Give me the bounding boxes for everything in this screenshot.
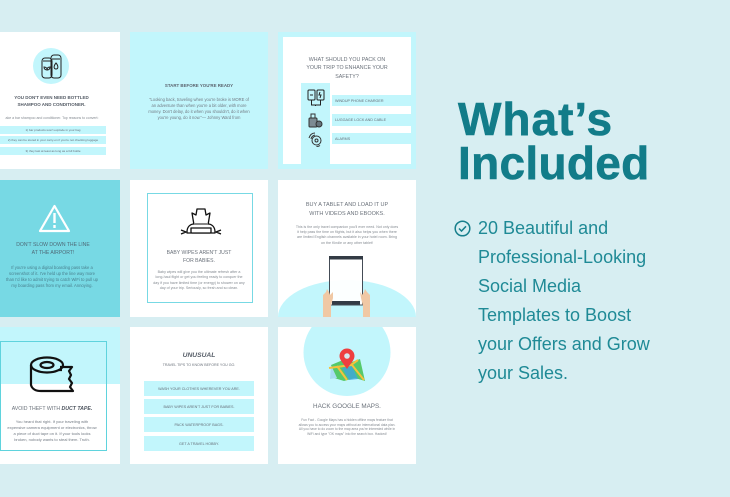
intro text: ake a bar shampoo and conditioner. Top reasons to convert: <box>6 116 98 120</box>
tip 2: BABY WIPES AREN'T JUST FOR BABIES. <box>164 404 234 408</box>
quote: "Looking back, traveling when you're broke is MORE of <box>149 97 249 102</box>
panel: tablet card <box>278 180 416 317</box>
body text: screenshot of it. I've held up the line way more <box>9 271 95 276</box>
description text <box>478 218 650 383</box>
panel: google maps card <box>278 327 416 464</box>
description text: 20 Beautiful and <box>478 218 608 238</box>
icon: luggage lock <box>308 114 322 128</box>
heading: YOU DON'T EVEN NEED BOTTLED <box>14 95 89 100</box>
heading: BUY A TABLET AND LOAD IT UP <box>306 202 388 208</box>
title <box>458 93 650 188</box>
icon: alarm <box>308 132 322 147</box>
list item 3: 3) they last at least as long as a full bottle <box>25 149 81 153</box>
body text: on the Kindle or any other tablet! <box>321 241 373 245</box>
heading: SAFETY? <box>335 74 359 80</box>
heading: WHAT SHOULD YOU PACK ON <box>309 57 385 63</box>
description text: your Offers and Grow <box>478 334 650 354</box>
body text: You heard that right. If your traveling with <box>16 419 88 424</box>
heading <box>306 202 388 217</box>
icon: warning triangle <box>38 204 70 232</box>
body text: day of your trip. Seriously, so fresh and so clean. <box>160 286 238 290</box>
heading <box>14 95 89 107</box>
list item 2: 2) they can be stored in your carry-on if you're not checking luggage <box>8 138 98 142</box>
body text: This is the only travel companion you'll ever need. Not only does <box>296 225 398 229</box>
list item 1 <box>0 126 106 134</box>
body text: Baby wipes will give you the ultimate refresh after a <box>158 270 240 274</box>
heading: START BEFORE YOU'RE READY <box>165 83 233 88</box>
heading: HACK GOOGLE MAPS. <box>313 403 381 410</box>
inner border frame <box>0 341 107 451</box>
title: What’s <box>458 93 613 145</box>
list item 1: 1) bar products won't explode in your bag <box>26 128 80 132</box>
body text: long-haul flight or get you feeling ready to conquer the <box>155 275 243 279</box>
icon column <box>301 83 330 164</box>
tip 4: GET A TRAVEL HOBBY. <box>179 442 219 446</box>
tip 4 <box>144 436 254 451</box>
description text: your Sales. <box>478 363 568 383</box>
body text: broken, nobody wants to steal them. Truth. <box>14 437 90 442</box>
panel: shampoo card <box>0 32 120 169</box>
panel: safety packing card <box>278 32 416 169</box>
tip 3: PACK WATERPROOF BAGS. <box>174 422 224 426</box>
body text: a piece of duct tape on it. If your tools looks <box>14 431 90 436</box>
heading: FOR BABIES. <box>183 258 215 264</box>
body text <box>6 265 98 288</box>
panel: baby wipes card <box>130 180 268 317</box>
heading: WITH VIDEOS AND EBOOKS. <box>309 211 385 217</box>
tip 3 <box>144 417 254 432</box>
panel: duct tape card <box>0 327 120 464</box>
tip 2 <box>144 399 254 414</box>
body text: If you're using a digital boarding pass take a <box>11 265 93 270</box>
heading: AT THE AIRPORT! <box>32 250 74 256</box>
heading: DON'T SLOW DOWN THE LINE <box>16 242 90 248</box>
quote: you're young, do it now."— Johnny Ward from <box>158 115 240 120</box>
panel: start before you're ready card <box>130 32 268 169</box>
list item 2 <box>0 136 106 144</box>
icon: shampoo bottles <box>33 48 69 84</box>
body text: expensive camera equipment or electronics, throw <box>7 425 97 430</box>
icon: wipes pack <box>180 208 222 235</box>
body text <box>7 419 97 442</box>
top color band <box>0 327 120 384</box>
subheading: TRAVEL TIPS TO KNOW BEFORE YOU GO. <box>163 363 235 367</box>
quote: an adventure than when you're a bit older, with more <box>152 103 246 108</box>
description text: Professional-Looking <box>478 247 646 267</box>
heading <box>16 242 90 256</box>
row: alarms <box>332 133 411 144</box>
description text: Templates to Boost <box>478 305 631 325</box>
row: windup phone charger <box>332 95 411 106</box>
icon: check circle <box>454 220 471 236</box>
heading: AVOID THEFT WITH DUCT TAPE. <box>12 406 92 412</box>
body text: Fun Fact - Google Maps has a hidden offline maps feature that <box>301 418 393 422</box>
body text <box>296 225 398 245</box>
body text: than I'd like to admit trying to catch WiFi to pull up <box>6 277 98 282</box>
panel: airport card <box>0 180 120 317</box>
icon: power charger <box>308 90 324 106</box>
body text: day if you have limited time (or energy) to shower on any <box>153 281 245 285</box>
panel: unusual travel tips card <box>130 327 268 464</box>
body text: it help pass the time on flights, but it also helps you when there <box>297 230 397 234</box>
heading: YOUR TRIP TO ENHANCE YOUR <box>306 65 388 71</box>
icon: duct tape roll <box>30 356 74 392</box>
heading <box>167 250 232 264</box>
row: windup phone charger: WINDUP PHONE CHARGER <box>335 98 384 102</box>
body text: my boarding pass from my email. Annoying. <box>11 283 93 288</box>
list item 3 <box>0 147 106 155</box>
heading: UNUSUAL <box>183 352 215 359</box>
tip 1: WASH YOUR CLOTHES WHEREVER YOU ARE. <box>158 386 240 390</box>
quote <box>148 97 250 120</box>
row: alarms: ALARMS <box>335 136 350 140</box>
body text: WiFi and type "OK maps" into the search box. Hacked! <box>307 432 387 436</box>
row: luggage lock and cable: LUGGAGE LOCK AND CABLE <box>335 118 386 122</box>
description text: Social Media <box>478 276 581 296</box>
title: Included <box>458 136 650 188</box>
body text <box>298 418 396 436</box>
heading: BABY WIPES AREN'T JUST <box>167 250 231 256</box>
illustration: map pin in circle <box>304 327 390 396</box>
illustration: hands holding tablet <box>278 256 416 317</box>
heading <box>306 57 388 80</box>
heading: SHAMPOO AND CONDITIONER. <box>17 102 86 107</box>
inner white panel <box>283 37 411 164</box>
body text: All you have to do zoom to the map area you're interested while in <box>299 427 395 431</box>
quote: money. Don't delay, do it when you shouldn't, do it when <box>148 109 250 114</box>
body text: are limited English channels available in your hotel room. Bring <box>297 235 397 239</box>
row: luggage lock and cable <box>332 114 411 126</box>
inner border frame <box>147 193 253 303</box>
body text: allows you to access your maps without an international data plan. <box>299 423 395 427</box>
body text <box>153 270 245 290</box>
tip 1 <box>144 381 254 396</box>
